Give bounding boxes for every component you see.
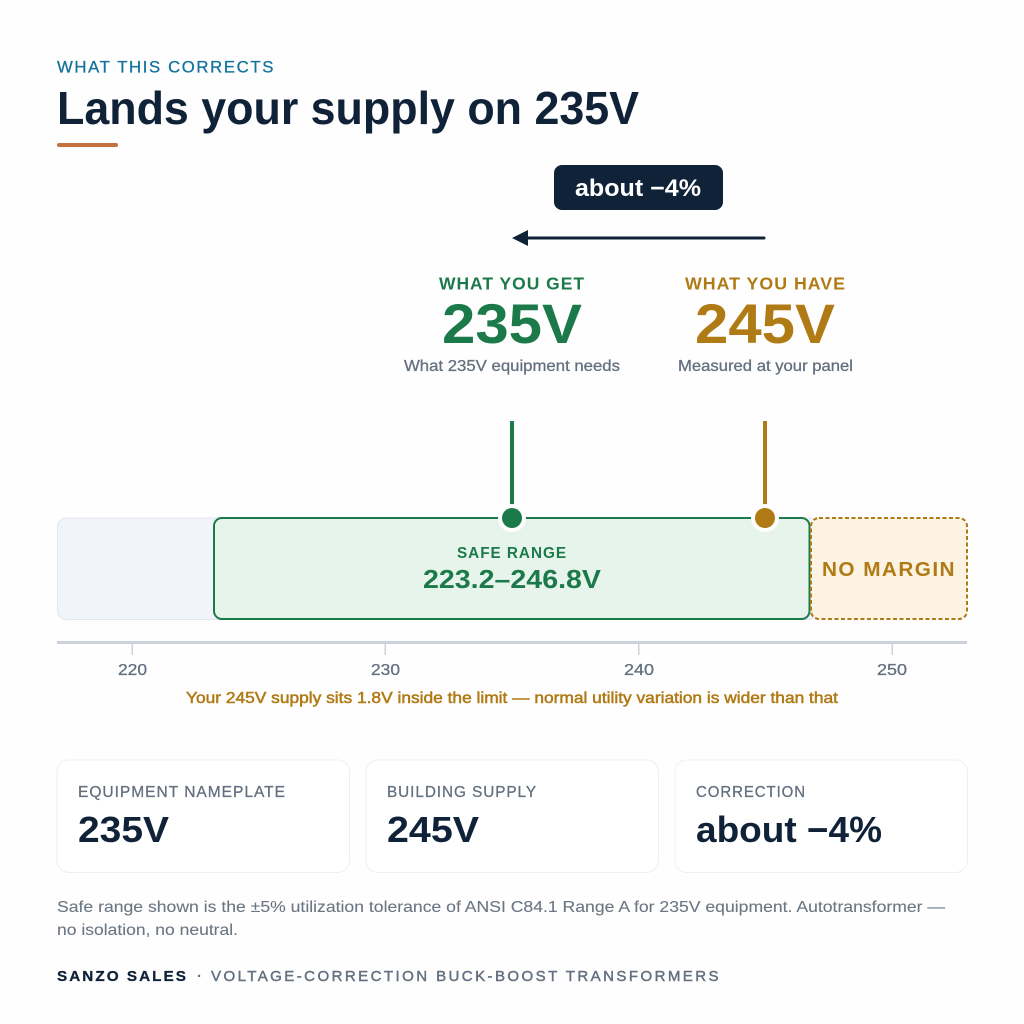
footer brand line: VOLTAGE-CORRECTION BUCK-BOOST TRANSFORMERS [211, 968, 721, 985]
voltage axis: 220 [118, 662, 147, 679]
card: correction [675, 760, 968, 872]
safe range band [214, 518, 810, 619]
voltage axis: 250 [877, 662, 907, 679]
arrow: from 245V to 235V [512, 230, 764, 246]
correction badge: about −4% [575, 175, 701, 202]
footer brand line: SANZO SALES [57, 968, 188, 985]
current voltage callout: WHAT YOU HAVE [685, 274, 846, 294]
margin warning note: Your 245V supply sits 1.8V inside the limit — normal utility variation is wider than that [186, 690, 839, 707]
card: correction: about −4% [696, 809, 882, 850]
correction badge [554, 165, 723, 210]
card: building supply: 245V [387, 809, 479, 850]
marker: 245V [751, 421, 779, 532]
voltage axis: 240 [624, 662, 654, 679]
full range track [58, 518, 818, 620]
no margin band [811, 518, 967, 619]
safe range band: 223.2–246.8V [423, 564, 602, 594]
card: equipment nameplate [57, 760, 350, 872]
target voltage callout: What 235V equipment needs [404, 358, 620, 375]
title: Lands your supply on 235V [57, 82, 639, 134]
footer brand line: · [197, 968, 202, 985]
card: equipment nameplate: EQUIPMENT NAMEPLATE [78, 784, 286, 801]
voltage scale chart [57, 421, 967, 679]
voltage axis: 230 [371, 662, 400, 679]
footnote [57, 899, 945, 939]
voltage axis [57, 641, 967, 679]
target voltage callout: 235V [442, 292, 582, 355]
card: building supply: BUILDING SUPPLY [387, 784, 537, 801]
no margin band: NO MARGIN [822, 558, 956, 581]
current voltage callout [678, 274, 853, 375]
target voltage callout: WHAT YOU GET [439, 274, 585, 294]
title accent bar [57, 143, 118, 147]
target voltage callout [404, 274, 620, 375]
eyebrow label: WHAT THIS CORRECTS [57, 59, 275, 77]
card: equipment nameplate: 235V [78, 809, 169, 850]
current voltage callout: Measured at your panel [678, 358, 853, 375]
marker: 235V [498, 421, 526, 532]
footnote: Safe range shown is the ±5% utilization tolerance of ANSI C84.1 Range A for 235V equipment. Autotransformer — [57, 899, 945, 916]
card: correction: CORRECTION [696, 784, 806, 801]
footnote: no isolation, no neutral. [57, 922, 238, 939]
card: building supply [366, 760, 658, 872]
current voltage callout: 245V [695, 292, 835, 355]
safe range band: SAFE RANGE [457, 545, 567, 562]
